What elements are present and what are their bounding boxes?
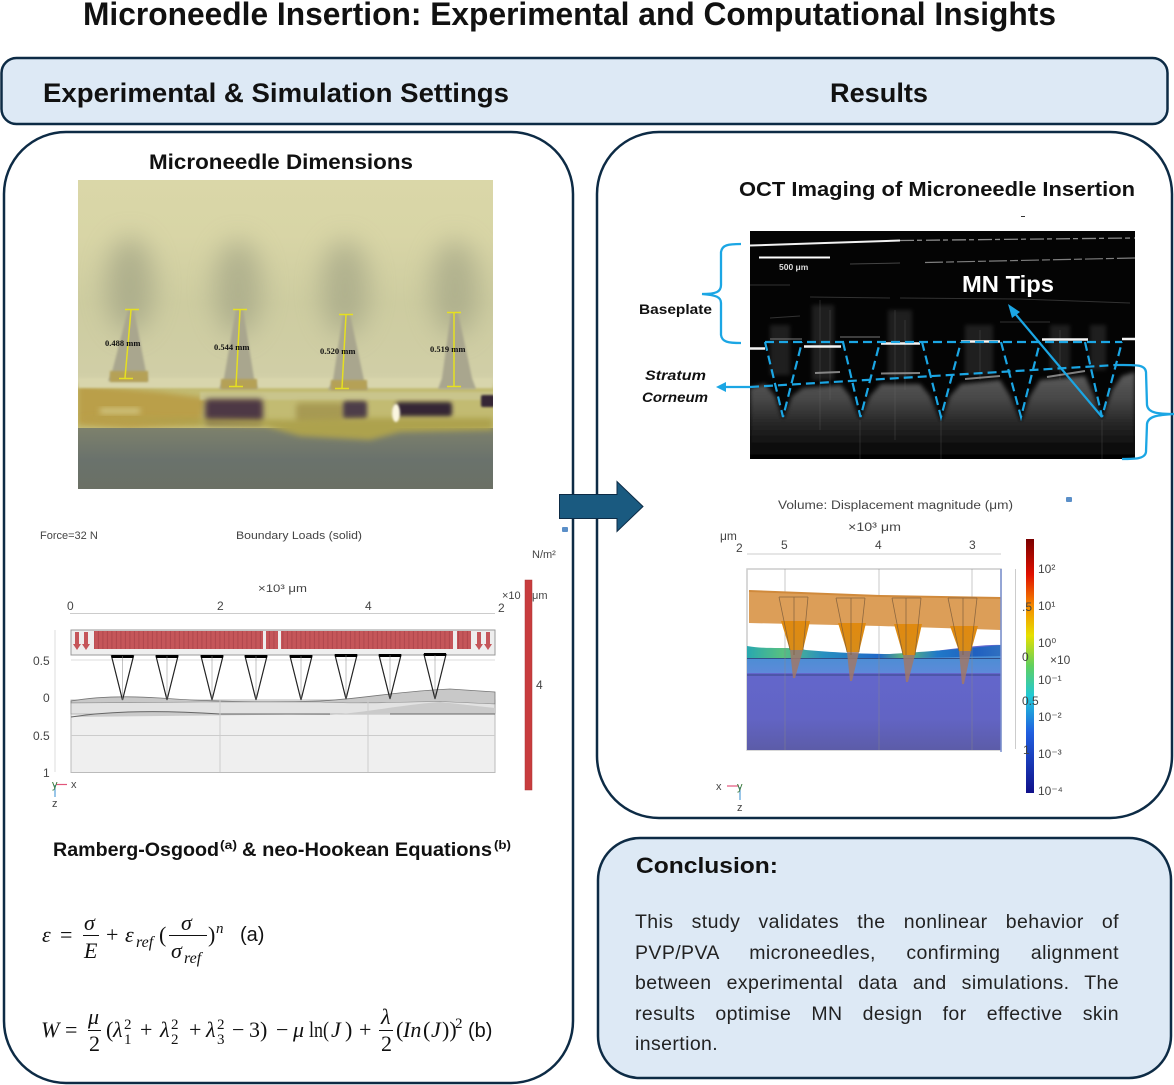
- axis triad: [52, 779, 77, 810]
- equation a: Ramberg-Osgood: ref: [184, 950, 204, 967]
- needle 3: 0.520 mm: [320, 346, 355, 356]
- chart: displacement magnitude: [716, 497, 1072, 814]
- image: OCT scan: 500 μm: [779, 262, 809, 272]
- colour bar: displacement: 10⁻³: [1038, 747, 1062, 761]
- colour bar: displacement: 1: [1023, 743, 1030, 757]
- equation b: neo-Hookean: 3: [217, 1032, 224, 1048]
- chart: displacement magnitude: 5: [781, 538, 788, 552]
- baseplate with load arrows: [71, 630, 495, 660]
- equation b: neo-Hookean: In: [402, 1017, 421, 1042]
- heading: equations: & neo-Hookean Equations: [242, 840, 492, 861]
- axis triad: [716, 781, 743, 814]
- equation a: Ramberg-Osgood: +: [106, 922, 118, 947]
- needle cones: [781, 621, 978, 684]
- needle 2: 0.544 mm: [214, 342, 249, 352]
- equation b: neo-Hookean: λ: [205, 1017, 216, 1042]
- arrow: stratum corneum: [716, 382, 750, 392]
- heading: equations: [53, 838, 511, 861]
- equation a: Ramberg-Osgood: ε: [42, 922, 51, 947]
- equation b: neo-Hookean: (: [423, 1017, 430, 1042]
- equation b: neo-Hookean: 2: [381, 1031, 392, 1056]
- equation b: neo-Hookean: W: [41, 1017, 61, 1042]
- axis triad: z: [737, 802, 742, 814]
- chart: displacement magnitude: Volume: Displacement magnitude (μm): [778, 500, 1013, 512]
- chart: boundary loads: 1: [43, 766, 50, 780]
- heading: conclusion: Conclusion:: [636, 853, 778, 878]
- chart: displacement magnitude: ×10³ μm: [848, 520, 901, 534]
- conclusion text: between experimental data and simulations. The: [635, 972, 1119, 994]
- chart: boundary loads: 0: [67, 599, 74, 613]
- axis triad: z: [52, 798, 58, 810]
- equation b: neo-Hookean: (: [396, 1017, 403, 1042]
- chart: boundary loads: 0: [43, 691, 50, 705]
- axis triad: x: [71, 779, 77, 791]
- equation a: Ramberg-Osgood: ε: [125, 922, 134, 947]
- equation b: neo-Hookean: +: [359, 1017, 371, 1042]
- label: baseplate: Baseplate: [639, 301, 712, 317]
- colour bar: load: ×10: [502, 590, 521, 602]
- equation b: neo-Hookean: λ: [380, 1004, 391, 1029]
- chart: boundary loads: 2: [498, 601, 505, 615]
- equation b: neo-Hookean: =: [65, 1017, 77, 1042]
- colour bar: load: μm: [532, 590, 548, 602]
- colour bar: displacement: [1022, 539, 1071, 798]
- equation a: Ramberg-Osgood: σ: [171, 938, 183, 963]
- equation a: Ramberg-Osgood: [42, 910, 264, 967]
- equation b: neo-Hookean: 2: [217, 1017, 224, 1033]
- equation b: neo-Hookean: 2: [171, 1032, 178, 1048]
- needle 4: [430, 312, 476, 389]
- brace: tissue depth: [1115, 365, 1174, 459]
- 3D simulation view: [747, 569, 1001, 752]
- heading: experimental and simulation settings: Experimental & Simulation Settings: [43, 78, 509, 108]
- equation a: Ramberg-Osgood: =: [60, 922, 72, 947]
- heading: equations: (b): [494, 838, 511, 852]
- heading: results: Results: [830, 78, 928, 108]
- needle outlines: [112, 654, 446, 700]
- equation b: neo-Hookean: 2: [455, 1016, 462, 1032]
- chart: boundary loads: Boundary Loads (solid): [236, 530, 362, 542]
- axis triad: y: [737, 781, 743, 793]
- equation b: neo-Hookean: μ: [87, 1004, 99, 1029]
- conclusion text: PVP/PVA microneedles, confirming alignment: [635, 942, 1119, 964]
- equation b: neo-Hookean: −: [232, 1017, 244, 1042]
- equation b: neo-Hookean: 3): [249, 1017, 267, 1042]
- arrow: MN tips: [1008, 304, 1102, 417]
- equation a: Ramberg-Osgood: σ: [181, 910, 193, 935]
- axis triad: x: [716, 781, 722, 793]
- conclusion text: insertion.: [635, 1033, 718, 1055]
- chart: boundary loads: 0.5: [33, 729, 50, 743]
- chart: boundary loads: 2: [217, 599, 224, 613]
- equation b: neo-Hookean: −: [276, 1017, 288, 1042]
- equation b: neo-Hookean: 2: [171, 1017, 178, 1033]
- equation b: neo-Hookean: (b): [468, 1020, 492, 1042]
- equation a: Ramberg-Osgood: ref: [136, 934, 156, 951]
- equation b: neo-Hookean: 1: [124, 1032, 132, 1048]
- skin model: [71, 689, 495, 772]
- photo: microneedle dimensions: [70, 180, 500, 492]
- needle 2: [214, 309, 258, 389]
- panel: conclusion: [598, 838, 1171, 1078]
- equation b: neo-Hookean: λ: [159, 1017, 170, 1042]
- conclusion text: [635, 907, 1119, 1062]
- arrow: settings to results: [560, 482, 643, 532]
- header bar: [2, 58, 1168, 124]
- equation b: neo-Hookean: (: [106, 1017, 113, 1042]
- colour bar: displacement: 10²: [1038, 562, 1055, 576]
- heading: equations: Ramberg-Osgood: [53, 840, 219, 861]
- colour bar: displacement: 10¹: [1038, 599, 1055, 613]
- colour bar: load: 4: [536, 678, 543, 692]
- needle 1: 0.488 mm: [105, 338, 140, 348]
- equation b: neo-Hookean: J: [431, 1017, 442, 1042]
- equation a: Ramberg-Osgood: E: [83, 938, 98, 963]
- colour bar: displacement: ×10: [1050, 653, 1071, 667]
- label: MN Tips: MN Tips: [962, 271, 1054, 297]
- equation b: neo-Hookean: )): [442, 1017, 457, 1042]
- needle 4: 0.519 mm: [430, 344, 465, 354]
- equation a: Ramberg-Osgood: ): [208, 922, 215, 947]
- heading: equations: (a): [220, 838, 237, 852]
- needle 3: [320, 314, 368, 390]
- equation b: neo-Hookean: 2: [124, 1017, 132, 1033]
- colour bar: displacement: 0: [1022, 650, 1029, 664]
- dashed needle outlines: [750, 342, 1122, 417]
- chart: displacement magnitude: 4: [875, 538, 882, 552]
- brace: baseplate: [702, 244, 741, 343]
- chart: boundary loads: Force=32 N: [40, 530, 98, 542]
- colour bar: displacement: 10⁰: [1038, 636, 1056, 650]
- equation b: neo-Hookean: +: [140, 1017, 152, 1042]
- colour bar: displacement: 0.5: [1022, 694, 1039, 708]
- chart: displacement magnitude: 2: [736, 541, 743, 555]
- colour bar: displacement: .5: [1022, 600, 1032, 614]
- equation b: neo-Hookean: +: [189, 1017, 201, 1042]
- equation b: neo-Hookean: 2: [89, 1031, 100, 1056]
- chart: boundary loads: 0.5: [33, 654, 50, 668]
- axis triad: y: [52, 779, 58, 791]
- panel: results: [597, 132, 1174, 818]
- colour bar: displacement: 10⁻¹: [1038, 673, 1062, 687]
- equation b: neo-Hookean: ): [345, 1017, 352, 1042]
- label: stratum corneum: Stratum: [645, 367, 706, 383]
- equation b: neo-Hookean: μ: [292, 1017, 304, 1042]
- equation b: neo-Hookean: J: [331, 1017, 342, 1042]
- equation b: neo-Hookean: ln(: [309, 1017, 329, 1042]
- heading: OCT imaging: OCT Imaging of Microneedle Insertion: [739, 178, 1135, 201]
- needle 1: [105, 310, 148, 382]
- colour bar: displacement: 10⁻⁴: [1038, 784, 1063, 798]
- equation a: Ramberg-Osgood: (a): [240, 924, 264, 946]
- equation b: neo-Hookean: [41, 1004, 492, 1056]
- chart: boundary loads: 4: [365, 599, 372, 613]
- colour bar: load: [502, 549, 556, 790]
- image: OCT scan: [750, 231, 1135, 470]
- equation a: Ramberg-Osgood: n: [216, 921, 224, 937]
- conclusion text: results optimise MN design for effective skin: [635, 1002, 1119, 1024]
- heading: microneedle dimensions: Microneedle Dimensions: [149, 151, 413, 174]
- equation b: neo-Hookean: λ: [112, 1017, 123, 1042]
- chart: boundary loads: [33, 527, 568, 810]
- colour bar: displacement: 10⁻²: [1038, 710, 1062, 724]
- label: stratum corneum: Corneum: [642, 389, 708, 405]
- equation a: Ramberg-Osgood: σ: [84, 910, 96, 935]
- chart: displacement magnitude: 3: [969, 538, 976, 552]
- chart: boundary loads: ×10³ μm: [258, 583, 307, 595]
- equation a: Ramberg-Osgood: (: [159, 922, 166, 947]
- conclusion text: This study validates the nonlinear behavior of: [635, 911, 1119, 933]
- colour bar: load: N/m²: [532, 549, 556, 561]
- label: stratum corneum: [642, 367, 708, 405]
- chart: displacement magnitude: μm: [720, 529, 737, 543]
